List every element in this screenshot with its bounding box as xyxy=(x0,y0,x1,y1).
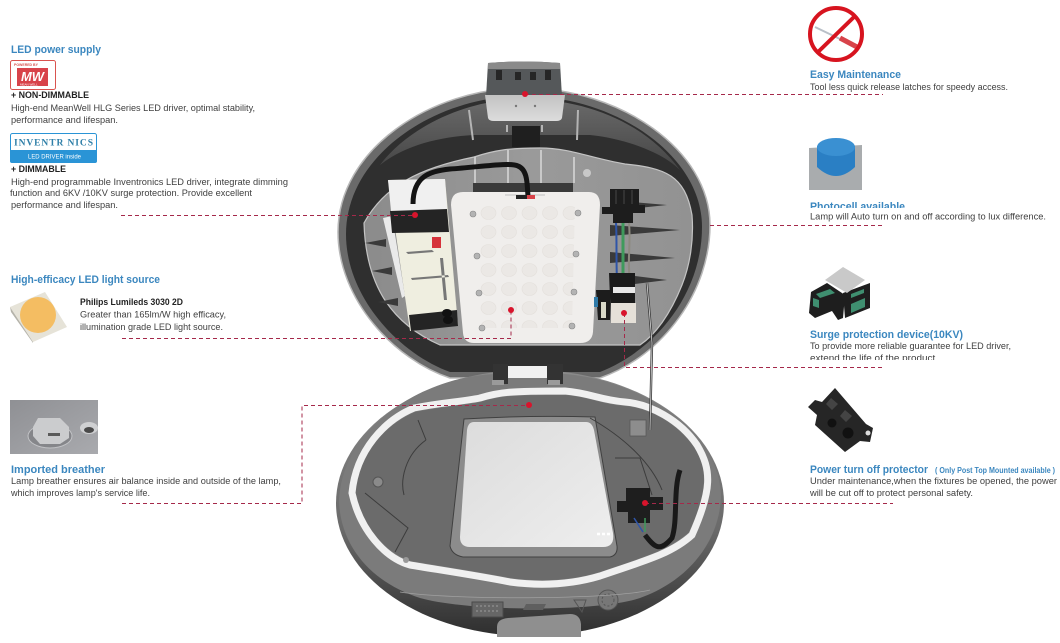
LED module board xyxy=(451,192,600,343)
text: breather description: Lamp breather ensures air balance inside and outside of the lamp, xyxy=(11,476,281,486)
panel: LED light source xyxy=(10,274,226,343)
hinge xyxy=(492,364,563,385)
panel: power turn off protector xyxy=(808,388,1057,498)
heading: imported breather: Imported breather xyxy=(11,464,106,476)
heading: LED power supply: LED power supply xyxy=(11,44,102,56)
text: non-dimmable: performance and lifespan. xyxy=(11,115,118,125)
heading: protector xyxy=(810,464,1055,476)
panel: photocell xyxy=(808,138,1046,222)
heading: surge protection: Surge protection device(10KV) xyxy=(810,329,963,341)
text: breather description: which improves lamp's service life. xyxy=(10,488,150,498)
text: non-dimmable: High-end MeanWell HLG Series LED driver, optimal stability, xyxy=(11,103,255,113)
surge protection device in lamp xyxy=(594,273,636,323)
logo: Mean Well: MW xyxy=(21,69,46,84)
photo: breather xyxy=(10,400,98,454)
text: surge description xyxy=(808,341,1011,364)
LED driver xyxy=(383,179,458,331)
support rod xyxy=(647,283,652,430)
text: dimmable: function and 6KV /10KV surge protection. Provide excellent xyxy=(10,188,252,198)
inner tray xyxy=(355,395,704,580)
terminal block and wires xyxy=(602,189,645,280)
rubber seal xyxy=(352,391,708,584)
text: Philips Lumileds: illumination grade LED light source. xyxy=(80,322,223,332)
text: dimmable: + DIMMABLE xyxy=(11,164,66,174)
panel: imported breather xyxy=(10,400,281,498)
logo: Inventronics: INVENTR NICS xyxy=(14,138,93,148)
heading: light source: High-efficacy LED light source xyxy=(11,274,160,286)
panel: upper lamp housing xyxy=(338,88,710,378)
inner basin xyxy=(364,148,693,345)
logo: Inventronics: LED DRIVER inside xyxy=(28,154,81,160)
text: breather description xyxy=(10,476,281,498)
text: Philips Lumileds: Greater than 165lm/W high efficacy, xyxy=(80,310,226,320)
heading: easy maintenance: Easy Maintenance xyxy=(810,69,901,81)
text: Philips Lumileds: Philips Lumileds 3030 2D xyxy=(80,297,183,307)
logo: Mean Well: MEAN WELL xyxy=(20,82,38,86)
text: dimmable: High-end programmable Inventronics LED driver, integrate dimming xyxy=(11,177,288,187)
photo: photocell xyxy=(809,138,862,190)
text: protector description xyxy=(809,476,1057,498)
icon: LED chip xyxy=(10,292,67,343)
heading: photocell: Photocell available xyxy=(810,201,905,213)
icon: no tools xyxy=(810,8,862,60)
text: protector description: will be cut off to protect personal safety. xyxy=(809,488,973,498)
text: photocell description: Lamp will Auto turn on and off according to lux difference. xyxy=(810,212,1046,222)
heat fins xyxy=(365,200,680,306)
window xyxy=(450,416,617,557)
callout lines and markers xyxy=(121,91,893,506)
text: Philips Lumileds xyxy=(80,297,226,332)
panel: LED power supply xyxy=(10,44,288,210)
panel: surge protection xyxy=(808,267,1011,364)
text: dimmable: performance and lifespan. xyxy=(11,200,118,210)
lid seams xyxy=(365,418,662,552)
text: surge description: extend the life of the product. xyxy=(810,353,938,363)
heading: protector: Power turn off protector xyxy=(810,464,929,476)
icon: protector xyxy=(808,388,873,452)
text: maintenance description: Tool less quick release latches for speedy access. xyxy=(810,82,1008,92)
logo: Mean Well xyxy=(10,60,56,90)
text: surge description: To provide more reliable guarantee for LED driver, xyxy=(810,341,1011,351)
icon: surge device xyxy=(809,267,870,320)
logo: Inventronics xyxy=(10,134,97,163)
lower lamp housing xyxy=(336,364,724,637)
text: non-dimmable: + NON-DIMMABLE xyxy=(11,90,89,100)
text: protector description: Under maintenance,when the fixtures be opened, the power xyxy=(810,476,1057,486)
bottom tab xyxy=(497,614,581,637)
text: non-dimmable xyxy=(11,90,255,125)
power cable xyxy=(413,164,535,204)
latch xyxy=(485,62,565,121)
moulded marks xyxy=(472,590,618,617)
panel: easy maintenance xyxy=(810,8,1008,92)
logo: Mean Well: POWERED BY xyxy=(14,63,39,67)
text: dimmable xyxy=(10,164,288,210)
safety switch terminal xyxy=(617,470,680,547)
